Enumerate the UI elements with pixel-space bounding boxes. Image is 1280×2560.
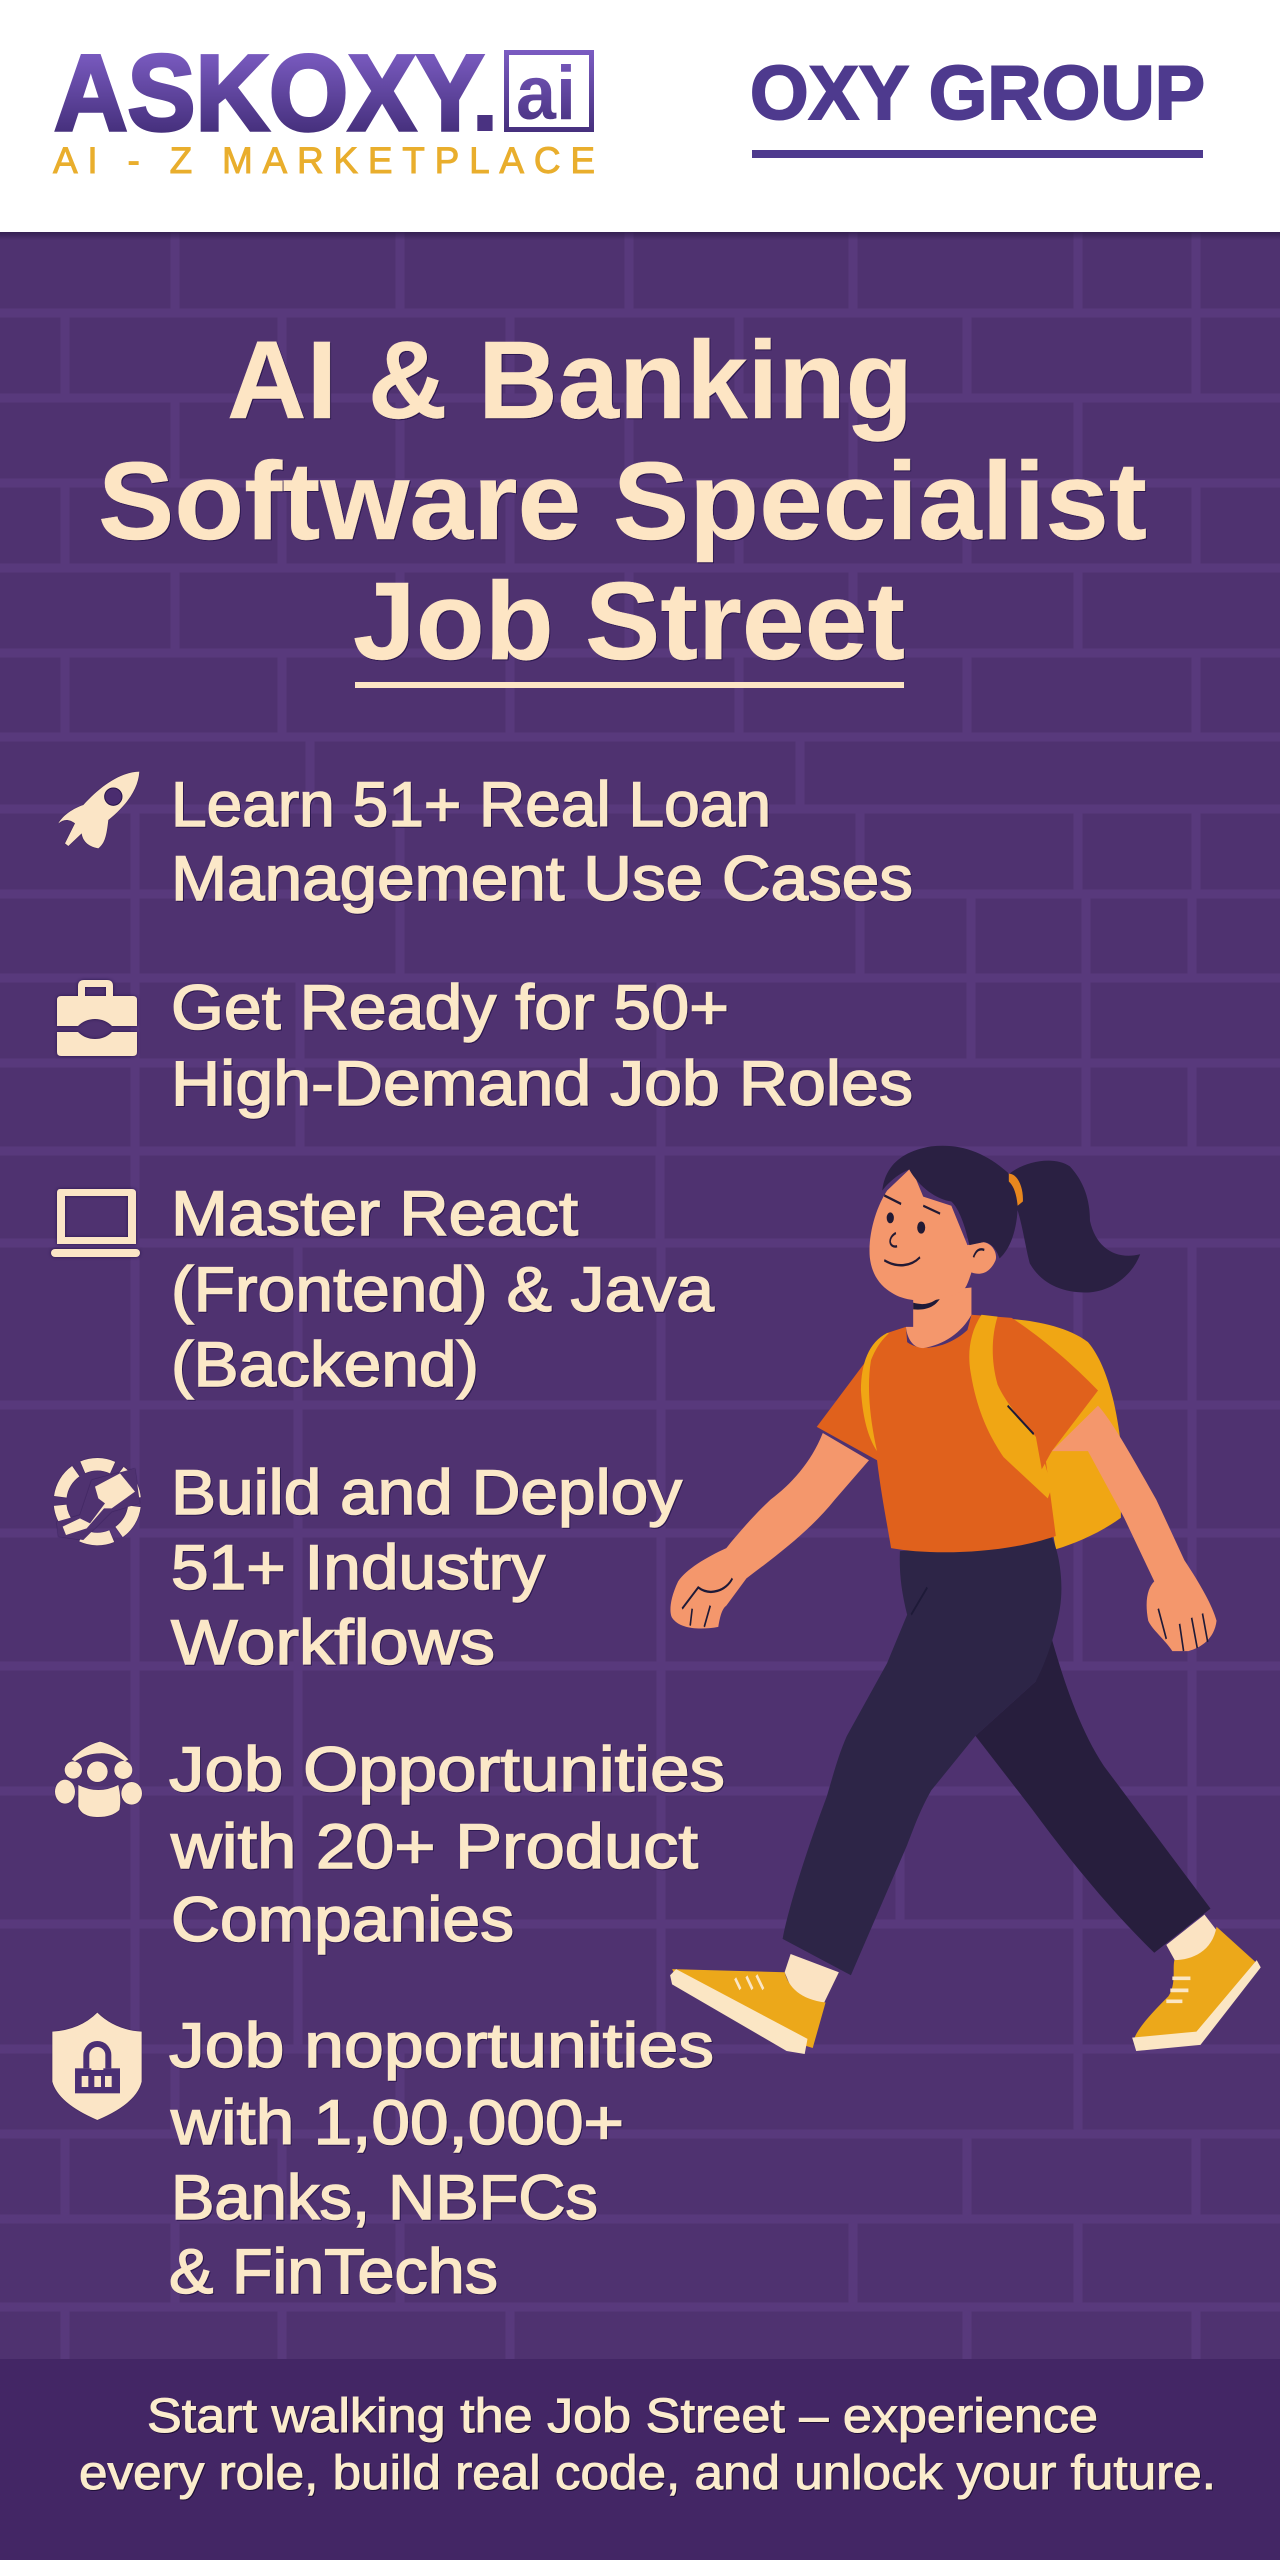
text: react and java: (Backend)	[171, 1330, 479, 1400]
header panel	[0, 0, 1280, 232]
text: react and java: Master React	[171, 1179, 579, 1249]
text: react and java: (Frontend) & Java	[171, 1255, 715, 1325]
logo tagline: AI - Z MARKETPLACE	[53, 140, 595, 181]
ASKOXY.ai logo: ASKOXY	[54, 32, 484, 153]
hand and clothing creases	[682, 1406, 1208, 1651]
feature: job roles	[57, 973, 913, 1119]
text: product companies	[169, 1735, 725, 1955]
ponytail band	[1009, 1174, 1023, 1206]
text: use cases: Management Use Cases	[171, 844, 913, 914]
closing banner: Start walking the Job Street – experience	[147, 2390, 1098, 2443]
back sock	[1166, 1915, 1219, 1963]
text: product companies: Companies	[171, 1885, 514, 1955]
ASKOXY.ai logo: ai	[516, 51, 576, 136]
icon: briefcase	[57, 980, 137, 1056]
icon: rocket	[58, 772, 139, 848]
right arm	[1052, 1406, 1217, 1651]
icon: shield with bank lock	[52, 2013, 142, 2120]
text: use cases	[171, 770, 913, 914]
title	[98, 319, 1147, 688]
t-shirt	[817, 1315, 1098, 1552]
ASKOXY.ai logo: .	[470, 33, 500, 154]
OXY GROUP wordmark: OXY GROUP	[750, 51, 1205, 136]
text: workflows: Workflows	[171, 1608, 495, 1678]
head	[870, 1146, 1023, 1301]
title: AI & Banking	[227, 319, 913, 442]
text: react and java	[171, 1179, 715, 1400]
text: workflows: 51+ Industry	[171, 1533, 546, 1603]
feature: workflows	[48, 1453, 683, 1678]
ponytail	[1008, 1161, 1140, 1292]
text: banks: with 1,00,000+	[170, 2088, 624, 2158]
closing banner: every role, build real code, and unlock your future.	[79, 2447, 1216, 2500]
text: banks: & FinTechs	[169, 2237, 498, 2307]
backpack straps	[861, 1315, 1052, 1498]
back leg	[975, 1639, 1211, 1953]
front leg and hips	[783, 1537, 1061, 1975]
title: Software Specialist	[98, 440, 1147, 563]
text: job roles: Get Ready for 50+	[171, 973, 729, 1043]
feature: banks	[52, 2011, 714, 2307]
text: use cases: Learn 51+ Real Loan	[171, 770, 771, 840]
icon: laptop	[51, 1189, 140, 1257]
text: job roles	[171, 973, 913, 1119]
closing banner	[0, 2359, 1280, 2560]
icon: people group	[55, 1742, 142, 1817]
neck and collar	[906, 1288, 971, 1348]
front sock	[785, 1954, 839, 2006]
text: workflows: Build and Deploy	[171, 1458, 683, 1528]
text: banks	[169, 2011, 714, 2307]
backpack	[1012, 1319, 1121, 1549]
text: banks: Job noportunities	[169, 2011, 714, 2081]
text: product companies: with 20+ Product	[170, 1812, 699, 1882]
title: Job Street	[353, 560, 905, 683]
feature: react and java	[51, 1179, 715, 1400]
text: job roles: High-Demand Job Roles	[171, 1049, 913, 1119]
text: banks: Banks, NBFCs	[171, 2163, 598, 2233]
illustration: walking woman with backpack	[670, 1146, 1261, 2054]
text: workflows	[171, 1458, 683, 1678]
front shoe	[670, 1969, 826, 2054]
feature: product companies	[55, 1735, 725, 1955]
back shoe	[1132, 1927, 1261, 2051]
left arm	[670, 1433, 869, 1629]
icon: deploy ring	[48, 1453, 146, 1551]
feature: use cases	[58, 770, 913, 914]
text: product companies: Job Opportunities	[169, 1735, 725, 1805]
